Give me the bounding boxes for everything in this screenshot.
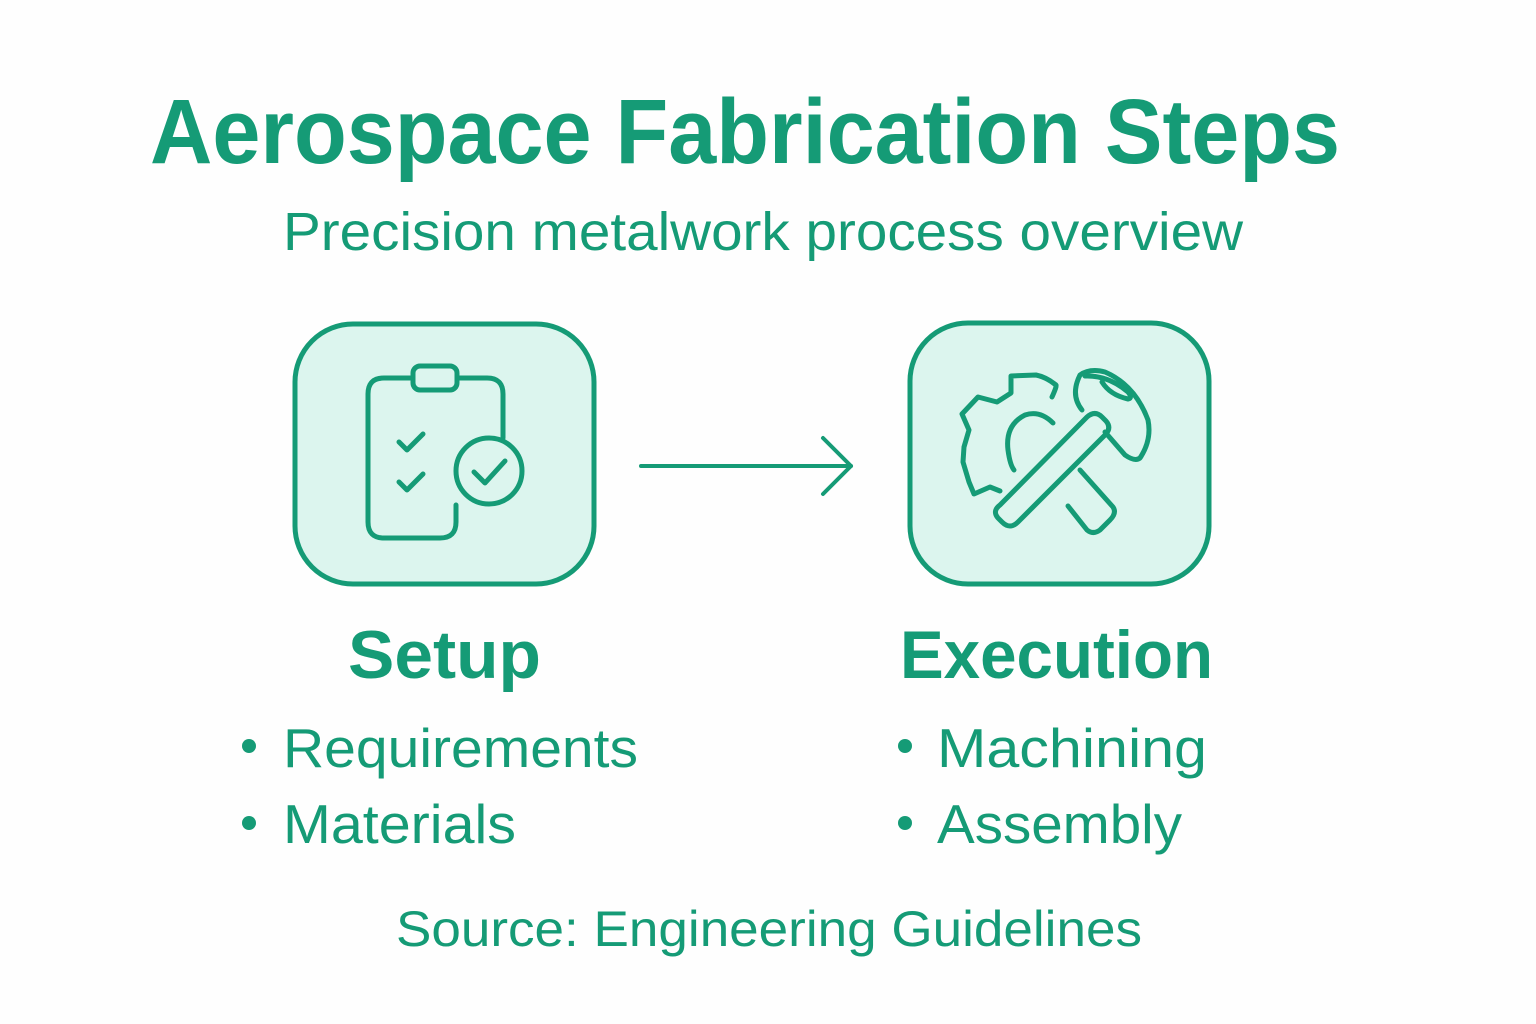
panel: setup icon xyxy=(295,324,594,584)
icon: clipboard xyxy=(368,366,522,538)
heading: setup: Setup xyxy=(348,617,541,693)
list: execution: Machining xyxy=(937,717,1207,779)
icon: gear and hammer xyxy=(962,371,1149,532)
list: setup xyxy=(242,717,638,855)
arrow xyxy=(641,438,851,494)
list: execution: Assembly xyxy=(937,793,1183,855)
heading: execution: Execution xyxy=(900,617,1213,693)
source note: Source: Engineering Guidelines xyxy=(396,901,1142,957)
list: setup: Requirements xyxy=(283,717,638,779)
list: setup: Materials xyxy=(283,793,516,855)
panel: execution icon xyxy=(910,323,1209,584)
subtitle: Precision metalwork process overview xyxy=(283,202,1244,262)
list: execution xyxy=(898,717,1207,855)
title: Aerospace Fabrication Steps xyxy=(150,81,1340,183)
